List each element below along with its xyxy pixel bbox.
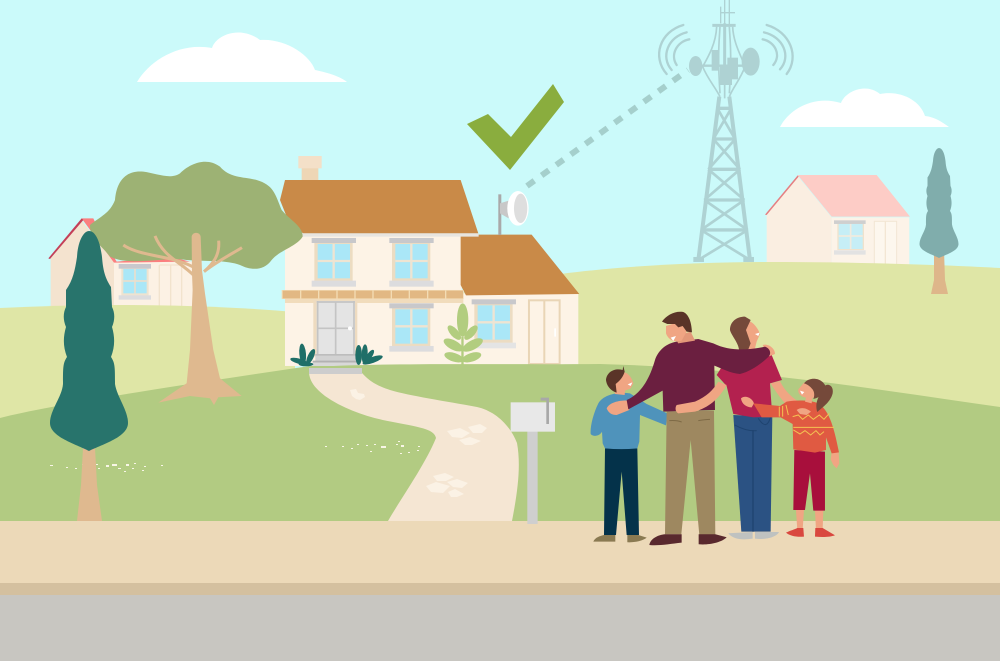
stepping stones — [350, 389, 487, 497]
sidewalk — [0, 521, 1000, 583]
leafy plant — [442, 303, 485, 366]
extension roof — [461, 235, 579, 295]
chimney — [298, 156, 322, 182]
hill: far left — [0, 305, 295, 430]
girl — [741, 379, 839, 537]
steps bottom — [309, 368, 362, 374]
family — [591, 312, 839, 545]
cypress tree: far right — [920, 148, 958, 294]
signal tower — [659, 0, 793, 262]
window: extension — [472, 299, 516, 348]
branches — [123, 236, 242, 275]
garden path — [309, 373, 519, 521]
road — [0, 595, 1000, 661]
cloud: top right — [780, 89, 949, 127]
front lawn: left — [0, 366, 380, 521]
cloud: top left — [137, 32, 347, 82]
antenna dish — [498, 191, 529, 235]
boy — [591, 366, 667, 542]
far house: right — [765, 175, 910, 265]
signal waves — [659, 25, 793, 74]
cypress tree: foreground — [50, 231, 128, 521]
main house — [280, 156, 579, 368]
front steps — [313, 354, 359, 368]
sky — [0, 0, 1000, 420]
main roof — [280, 180, 478, 233]
kerb — [0, 583, 1000, 595]
shrub right — [355, 344, 384, 366]
shrub left — [290, 343, 317, 366]
canopy — [90, 162, 303, 269]
far house: left — [48, 218, 197, 307]
trunk — [158, 233, 242, 405]
window: upper right — [389, 238, 434, 287]
tower mast and antennas — [689, 0, 760, 98]
house walls — [285, 233, 578, 366]
front door — [313, 300, 357, 357]
side door — [529, 300, 560, 364]
mailbox — [511, 398, 555, 524]
front lawn: right — [300, 364, 1000, 521]
tower lattice — [693, 97, 754, 262]
window: upper left — [312, 238, 356, 287]
big tree — [90, 162, 303, 405]
woman arm behind father — [676, 382, 727, 413]
hill: far right — [420, 262, 1000, 521]
bush and shrubs by door — [290, 303, 485, 366]
green check mark — [467, 84, 564, 170]
woman — [717, 317, 811, 539]
window: lower — [389, 303, 434, 352]
flowers on lawn — [50, 441, 420, 472]
wireless link dashed line — [527, 70, 688, 186]
wood band — [282, 290, 464, 303]
father — [607, 312, 775, 545]
